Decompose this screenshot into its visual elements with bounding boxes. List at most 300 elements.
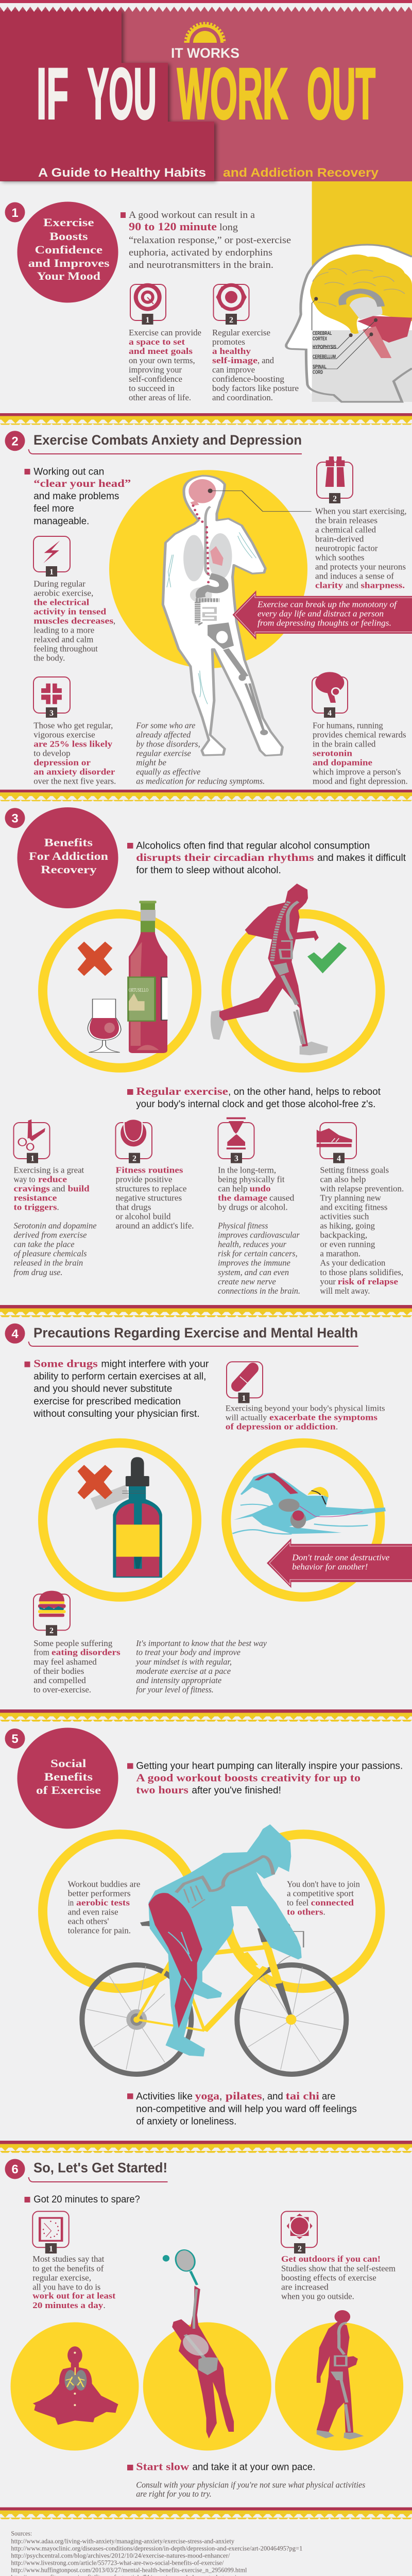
text: medication italic: as medication for reducing symptoms.	[136, 776, 265, 786]
heading: So, Let's Get Started!	[33, 2160, 167, 2176]
text: circadian rhythms	[127, 840, 406, 876]
text: outdoors: are increased	[281, 2282, 329, 2292]
heading circle: boosts confidence: and Improves	[28, 257, 110, 269]
callout arrow: monotony	[233, 590, 412, 640]
subtitle	[38, 166, 379, 180]
intro text: A good workout can result in a	[129, 210, 255, 221]
text: goals	[129, 328, 201, 402]
text: undo the damage: connections in the brain.	[218, 1286, 300, 1296]
text: workout buddies: tolerance for pain.	[68, 1926, 131, 1936]
text: some drugs: might interfere with your	[101, 1359, 209, 1369]
text: yoga pilates tai chi: ,	[219, 2091, 222, 2102]
text: relapse prevention: Try planning new	[320, 1193, 381, 1203]
text: cravings: way to	[13, 1175, 35, 1184]
text: goals: to succeed in	[129, 383, 175, 393]
divider 3	[0, 1305, 412, 1317]
text: muscles: the body.	[33, 653, 65, 663]
text: outdoors: boosting effects of exercise	[281, 2273, 376, 2282]
text: work out daily: to get the benefits of	[32, 2263, 104, 2273]
text: physical limits: Exercising beyond your body's physical limits	[226, 1404, 385, 1413]
text: less likely: depression or	[33, 757, 91, 767]
divider 5	[0, 2141, 412, 2153]
top band with white teeth	[0, 0, 412, 12]
ring right	[226, 914, 380, 1068]
subtitle: A Guide to Healthy Habits	[38, 166, 206, 180]
panel: section 5 social benefits	[5, 1728, 403, 2127]
icon: red x	[78, 942, 112, 976]
text: brain-derived: and protects your neurons	[315, 562, 406, 572]
text: creativity: after you've finished!	[192, 1785, 281, 1796]
text: physical limits: exacerbate the symptoms	[269, 1413, 378, 1422]
text: physical limits	[226, 1404, 385, 1431]
number badge 4: 4	[11, 1327, 19, 1341]
text: connected to others: You don't have to join	[287, 1879, 360, 1889]
text: undo the damage: by drugs or alcohol.	[218, 1202, 288, 1212]
icon: burger: 2	[49, 1626, 54, 1635]
text: relapse prevention: a marathon.	[320, 1249, 360, 1259]
text: moderate exercise italic: moderate exercise at a pace	[136, 1666, 231, 1676]
text: relapse prevention: Setting fitness goals	[320, 1165, 389, 1175]
callout arrow: monotony: every day life and distract a person	[258, 609, 384, 619]
sources: http://www.mayoclinic.org/diseases-conditions/depression/in-depth/depression-and-exercise/art-20046495?pg=1	[11, 2545, 302, 2552]
icon: cross	[33, 677, 70, 718]
number badge 1	[5, 202, 25, 223]
illustration: swimmer	[233, 1472, 386, 1534]
text: goals: self-confidence	[129, 374, 182, 384]
number badge 2	[5, 431, 25, 451]
text: self-image: and coordination.	[212, 393, 273, 402]
intro text: euphoria, activated by endorphins	[129, 247, 272, 258]
icon: clock: 1	[49, 2245, 53, 2253]
text: fitness routines: structures to replace	[115, 1184, 186, 1194]
illustration: wine bottle	[128, 901, 168, 1053]
icon: brain tree	[312, 672, 348, 718]
text: undo the damage: risk for certain cancers,	[218, 1249, 298, 1259]
text: self-image: promotes	[212, 337, 245, 347]
divider 4	[0, 1709, 412, 1722]
yellow circle	[109, 470, 307, 668]
sources: Sources:	[11, 2530, 32, 2537]
text: brain-derived	[315, 506, 407, 590]
title: if you work out	[37, 53, 375, 134]
text: moderate exercise italic	[135, 1638, 267, 1694]
callout arrow: destructive behavior: Don't trade one destructive	[291, 1552, 389, 1562]
text: workout buddies: each others'	[68, 1917, 109, 1926]
subtitle: and Addiction Recovery	[223, 166, 379, 180]
text: muscles: muscles decreases	[33, 616, 114, 625]
text: goals: and meet goals	[129, 346, 193, 356]
text: some drugs: exercise for prescribed medication	[33, 1396, 181, 1407]
text: relapse prevention: activities such	[320, 1212, 369, 1222]
callout arrow: destructive behavior: behavior for another!	[292, 1562, 368, 1572]
title: if you work out: YOU	[88, 53, 157, 134]
text: less likely: to develop	[33, 749, 71, 758]
panel: section 2 anxiety and depression	[5, 431, 412, 786]
text: circadian rhythms: and makes it difficult	[317, 853, 406, 863]
yellow circle: walking	[275, 2323, 403, 2450]
divider 2	[0, 790, 412, 801]
text: some drugs	[25, 1357, 209, 1419]
heading circle: For Addiction	[29, 850, 108, 862]
text: some drugs: ability to perform certain exercises at all,	[33, 1371, 206, 1382]
text: moderate exercise italic: for your level of fitness.	[136, 1685, 214, 1694]
text: clear your head	[25, 467, 131, 527]
text: undo the damage: improves cardiovascular	[218, 1230, 300, 1240]
text: relapse prevention: your	[320, 1277, 336, 1286]
text: eating disorders: eating disorders	[52, 1648, 121, 1657]
text: start slow: Start slow	[136, 2461, 190, 2473]
text: self-image	[212, 328, 299, 402]
ring right	[226, 1834, 380, 1988]
text: self-image: can improve	[212, 365, 255, 375]
text: regular exercise: Regular exercise	[136, 1085, 228, 1097]
text: undo the damage: create new nerve	[218, 1277, 276, 1286]
text: creativity: two hours	[136, 1784, 188, 1796]
panel: header	[0, 0, 412, 181]
text: yoga pilates tai chi: pilates	[226, 2090, 262, 2102]
icon: lightning: 1	[49, 568, 54, 577]
text: medication italic: equally as effective	[136, 767, 200, 776]
icon: green check	[307, 942, 347, 973]
icon: sun	[281, 2211, 317, 2253]
heading circle: Benefits	[44, 836, 93, 849]
sources: http://psychcentral.com/blog/archives/2012/10/24/exercise-natures-mood-enhancer/	[11, 2552, 230, 2560]
icon: lightning	[33, 536, 70, 577]
text: work out daily: all you have to do is	[32, 2282, 100, 2292]
heading circle: boosts confidence	[18, 202, 118, 303]
heading circle: of Exercise	[36, 1784, 101, 1797]
text: cravings: build	[68, 1184, 90, 1194]
text: self-image: Regular exercise	[212, 328, 270, 337]
icon: binoculars: 2	[333, 495, 337, 503]
text: cravings: and	[52, 1184, 65, 1194]
icon: eye: 2	[229, 316, 233, 325]
text: clear your head: and make problems	[33, 491, 119, 502]
text: yoga pilates tai chi: tai chi	[286, 2090, 319, 2102]
text: work out daily: .	[103, 2300, 106, 2310]
text: relapse prevention: risk of relapse	[338, 1277, 398, 1286]
intro text: and neurotransmitters in the brain.	[129, 260, 273, 270]
icon: pill: 1	[242, 1394, 246, 1403]
text: connected to others: .	[323, 1907, 325, 1917]
heading	[29, 432, 302, 454]
yellow circle: tennis	[143, 2323, 271, 2450]
illustration: human body	[163, 476, 312, 756]
illustration: bicycle	[82, 1921, 346, 2074]
text: clear your head: feel more	[33, 503, 74, 514]
icon: burger	[33, 1591, 70, 1636]
text: yoga pilates tai chi: Activities like	[136, 2091, 193, 2102]
ring left	[43, 1443, 197, 1597]
text: cravings: Serotonin and dopamine	[13, 1221, 97, 1231]
text: undo the damage: Physical fitness	[217, 1221, 268, 1231]
text: less likely: an anxiety disorder	[33, 767, 115, 776]
text: regular exercise: your body's internal clock and get those alcohol-free z's.	[136, 1099, 375, 1110]
illustration: head and brain: CEREBELLUM	[313, 353, 336, 360]
dark stepped panel	[0, 10, 214, 181]
text: cravings: from drug use.	[13, 1267, 63, 1277]
text: work out daily: Most studies say that	[32, 2254, 105, 2264]
icon: hourglass	[218, 1117, 254, 1163]
text: circadian rhythms: for them to sleep without alcohol.	[136, 865, 281, 876]
title: it works: IT WORKS	[171, 45, 239, 61]
text: serotonin: in the brain called	[313, 739, 376, 749]
heading: Exercise Combats Anxiety and Depression	[33, 432, 302, 448]
illustration: meditator	[33, 2346, 118, 2425]
text: medication italic: regular exercise	[136, 749, 191, 758]
text: moderate exercise italic: and intensity appropriate	[136, 1675, 221, 1685]
icon: running shoe: 4	[337, 1154, 341, 1163]
text: yoga pilates tai chi: non-competitive and will help you ward off feelings	[136, 2104, 357, 2114]
text: connected to others: to others	[287, 1907, 323, 1917]
text: brain-derived: brain-derived	[315, 534, 364, 544]
intro text: long	[219, 222, 238, 233]
text: relapse prevention: backpacking,	[320, 1230, 367, 1240]
text: relapse prevention: can also help	[320, 1175, 366, 1184]
text: less likely: vigorous exercise	[33, 730, 95, 739]
text: fitness routines: negative structures	[115, 1193, 182, 1203]
illustration: head and brain	[286, 181, 412, 402]
text: fitness routines: or alcohol build	[115, 1212, 171, 1222]
text: brain-derived: and induces a sense of	[315, 571, 394, 581]
text: cravings: can take the place	[13, 1240, 74, 1249]
text: outdoors: Get outdoors if you can!	[281, 2254, 381, 2264]
sources: http://www.huffingtonpost.com/2013/03/27/mental-health-benefits-exercise_n_2956099.html	[11, 2567, 247, 2574]
text: fitness routines: around an addict's life.	[115, 1221, 194, 1231]
intro text	[121, 210, 291, 270]
icon: sun: 2	[298, 2245, 302, 2253]
text: connected to others: to feel	[287, 1898, 309, 1908]
text: some drugs: and you should never substitute	[33, 1384, 172, 1395]
text: fitness routines: Fitness routines	[115, 1165, 183, 1175]
text: workout buddies: in	[68, 1898, 74, 1908]
text: clear your head: manageable.	[33, 516, 89, 527]
text: creativity: Getting your heart pumping can literally inspire your passions.	[136, 1760, 403, 1771]
number badge 1: 1	[11, 206, 19, 220]
illustration: runner	[211, 884, 328, 1055]
illustration: wine glass	[88, 999, 121, 1053]
callout arrow: destructive behavior	[267, 1538, 412, 1588]
text: medication italic: by those disorders,	[136, 739, 200, 749]
text: start slow	[127, 2461, 365, 2499]
text: eating disorders	[33, 1638, 121, 1694]
icon: tennis ball: 2	[132, 1154, 136, 1163]
text: muscles: the electrical	[33, 597, 90, 607]
divider 6	[0, 2507, 412, 2519]
text: workout buddies: Workout buddies are	[68, 1879, 140, 1889]
text: self-image: a healthy	[212, 346, 251, 356]
text: work out daily: work out for at least	[32, 2291, 116, 2301]
text: some drugs: without consulting your physician first.	[33, 1409, 200, 1419]
callout arrow: monotony: from depressing thoughts or feelings.	[258, 618, 391, 628]
text: cravings: to triggers	[13, 1202, 57, 1212]
text: start slow: are right for you to try.	[136, 2489, 212, 2499]
number badge 4	[5, 1324, 25, 1344]
heading circle: boosts confidence: Your Mood	[37, 269, 100, 282]
illustration: head and brain: SPINAL	[313, 364, 327, 370]
text: self-image: , and	[258, 355, 274, 365]
text: muscles: During regular	[33, 579, 85, 588]
text: undo the damage: caused	[269, 1193, 295, 1203]
text: outdoors: Studies show that the self-esteem	[281, 2263, 396, 2273]
icon: brain tree: 4	[328, 709, 332, 718]
ring left	[43, 914, 197, 1068]
number badge 6: 6	[11, 2163, 19, 2177]
text: brain-derived: neurotropic factor	[315, 544, 378, 553]
yellow circle: yoga	[10, 2323, 139, 2450]
icon: eye	[213, 283, 249, 325]
text: medication italic: already affected	[136, 730, 191, 739]
icon: pill	[227, 1362, 263, 1403]
text: work out daily: 20 minutes a day	[32, 2300, 104, 2310]
text: undo the damage: In the long-term,	[218, 1165, 276, 1175]
illustration: wine bottle: ORTUSELLO	[129, 987, 148, 993]
text: less likely: are 25% less likely	[33, 739, 113, 749]
sources	[11, 2530, 403, 2576]
text: cravings: released in the brain	[13, 1258, 83, 1268]
text: workout buddies: aerobic tests	[76, 1898, 130, 1908]
text: physical limits: of depression or addiction	[226, 1421, 336, 1431]
icon: target	[130, 283, 166, 325]
text: serotonin: mood and fight depression.	[313, 776, 408, 786]
panel: section 6 get started	[5, 2159, 403, 2499]
icon: target: 1	[145, 316, 149, 325]
number badge 2: 2	[11, 435, 19, 448]
text: serotonin: which improve a person's	[313, 767, 401, 776]
text: yoga pilates tai chi	[127, 2090, 357, 2127]
illustration: walker	[317, 2310, 364, 2439]
text: start slow: and take it at your own pace.	[193, 2462, 315, 2473]
text: undo the damage	[217, 1165, 300, 1296]
text: muscles: aerobic exercise,	[33, 588, 93, 598]
text: relapse prevention: and exciting fitness	[320, 1202, 387, 1212]
text: goals: on your own terms,	[129, 355, 195, 365]
icon: binoculars	[317, 456, 353, 503]
text: goals: Exercise can provide	[129, 328, 201, 337]
text: medication italic: might be	[136, 757, 166, 767]
text: undo the damage: the damage	[218, 1193, 267, 1203]
text: cravings: cravings	[13, 1184, 50, 1194]
text: relapse prevention	[320, 1165, 404, 1296]
text: circadian rhythms: Alcoholics often find that regular alcohol consumption	[136, 840, 370, 851]
text: less likely: Those who get regular,	[33, 720, 113, 730]
heading circle: boosts confidence: Exercise	[43, 216, 94, 229]
text: less likely: over the next five years.	[33, 776, 116, 786]
heading circle: boosts confidence: Boosts	[49, 230, 88, 243]
text: work out daily: regular exercise,	[32, 2273, 91, 2282]
text: eating disorders: from	[33, 1648, 49, 1657]
title: if you work out: IF	[37, 53, 68, 134]
icon: rising sun	[185, 23, 225, 43]
text: cravings: reduce	[38, 1175, 67, 1184]
heading	[29, 2160, 168, 2182]
heading circle: Social	[50, 1757, 86, 1770]
text: 20 minutes: Got 20 minutes to spare?	[33, 2194, 140, 2205]
text: relapse prevention: will melt away.	[320, 1286, 370, 1296]
text: moderate exercise italic: It's important to know that the best way	[135, 1638, 267, 1648]
heading circle	[18, 807, 118, 908]
text: self-image: body factors like posture	[212, 383, 299, 393]
text: serotonin: For humans, running	[313, 720, 383, 730]
text: brain-derived: a chemical called	[315, 525, 376, 535]
text: brain-derived: sharpness.	[360, 581, 405, 590]
text: eating disorders: may feel ashamed	[33, 1657, 97, 1667]
text: serotonin	[313, 720, 408, 786]
text: undo the damage: health, reduces your	[218, 1240, 287, 1249]
icon: scissors	[13, 1120, 49, 1163]
heading circle: Recovery	[41, 863, 97, 876]
text: work out daily	[32, 2254, 116, 2310]
text: cravings: of pleasure chemicals	[13, 1249, 87, 1259]
text: undo the damage: undo	[250, 1184, 271, 1194]
text: connected to others: a competitive sport	[287, 1889, 354, 1899]
text: start slow: Consult with your physician if you're not sure what physical activities	[136, 2480, 365, 2489]
illustration: head and brain: HYPOPHYSIS	[313, 344, 336, 350]
text: cravings: Exercising is a great	[13, 1165, 84, 1175]
text: brain-derived: clarity	[315, 581, 344, 590]
number badge 5	[5, 1728, 25, 1749]
text: muscles	[33, 579, 115, 663]
callout arrow: monotony: Exercise can break up the monotony of	[257, 599, 398, 609]
text: muscles: leading to a more	[33, 625, 94, 635]
text: fitness routines: provide positive	[115, 1175, 172, 1184]
icon: hourglass: 3	[234, 1154, 238, 1163]
text: self-image: confidence-boosting	[212, 374, 284, 384]
panel: section 4 precautions	[5, 1324, 412, 1694]
illustration: dropper bottle	[78, 1457, 162, 1578]
text: yoga pilates tai chi: are	[322, 2091, 336, 2102]
title: if you work out: WORK	[177, 53, 288, 134]
text: workout buddies	[68, 1879, 140, 1936]
intro text: 90 to 120 minute	[129, 220, 217, 233]
text: relapse prevention: or even running	[320, 1240, 375, 1249]
text: muscles: feeling throughout	[33, 644, 98, 654]
intro text: “relaxation response,” or post-exercise	[129, 235, 291, 246]
sources: http://www.adaa.org/living-with-anxiety/managing-anxiety/exercise-stress-and-anxiety	[11, 2538, 235, 2545]
illustration: head and brain: CORTEX	[313, 336, 327, 342]
text: goals: improving your	[129, 365, 182, 375]
heading circle	[18, 1728, 118, 1829]
text: workout buddies: and even raise	[68, 1907, 118, 1917]
text: connected to others: connected	[311, 1898, 354, 1908]
text: cravings: derived from exercise	[13, 1230, 87, 1240]
text: serotonin: provides chemical rewards	[313, 730, 406, 739]
text: regular exercise	[127, 1085, 381, 1110]
text: workout buddies: better performers	[68, 1889, 131, 1899]
text: medication italic	[135, 720, 265, 786]
icon: scissors: 1	[30, 1154, 35, 1163]
text: goals: a space to set	[129, 337, 185, 347]
text: outdoors	[281, 2254, 396, 2301]
text: relapse prevention: as hiking, going	[320, 1221, 375, 1231]
text: creativity: A good workout boosts creativity for up to	[136, 1771, 360, 1784]
text: eating disorders: of their bodies	[33, 1666, 84, 1676]
heading circle: Benefits	[44, 1770, 93, 1783]
heading circle: boosts confidence: Confidence	[35, 243, 102, 256]
text: serotonin: and dopamine	[313, 757, 372, 767]
panel: section 1 mood	[5, 181, 412, 402]
text: yoga pilates tai chi: yoga	[195, 2090, 220, 2102]
text: serotonin: serotonin	[313, 749, 352, 758]
ring left	[43, 1834, 197, 1988]
text: relapse prevention: As your dedication	[320, 1258, 385, 1268]
illustration: head and brain: CORD	[313, 369, 323, 376]
sources: http://www.livestrong.com/article/557723-what-are-two-social-benefits-of-exercise/	[11, 2560, 224, 2567]
text: medication italic: For some who are	[135, 720, 195, 730]
text: clear your head: Working out can	[33, 467, 104, 478]
icon: tennis ball	[115, 1120, 152, 1163]
text: self-image: self-image	[212, 355, 258, 365]
